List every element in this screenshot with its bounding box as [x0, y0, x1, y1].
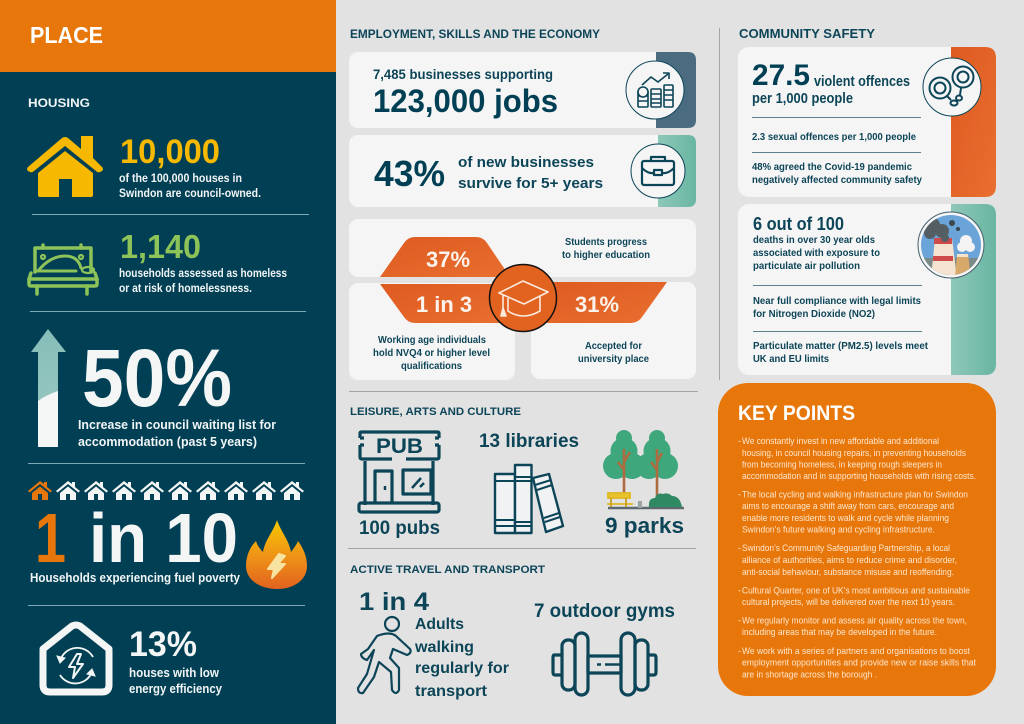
- education group: university place: [578, 354, 650, 365]
- card: air pollution: 6 out of 100: [753, 214, 844, 234]
- label: outdoor gyms: 7 outdoor gyms: [534, 601, 675, 622]
- card: violent offences: per 1,000 people: [752, 91, 853, 107]
- icon: handcuffs: [923, 58, 981, 116]
- education group: Students progress: [565, 237, 648, 248]
- title: PLACE: [30, 22, 103, 48]
- panel: employment, skills and the economy: [349, 29, 696, 380]
- heading: leisure: LEISURE, ARTS AND CULTURE: [350, 406, 521, 418]
- card: violent offences: 27.5: [752, 59, 810, 92]
- icon: flame: [246, 520, 307, 589]
- text: point 2: -: [738, 490, 741, 500]
- header band: [0, 0, 336, 72]
- text: point 1: accommodation and in supporting households with rising costs.: [742, 471, 976, 481]
- text: point 5: -: [738, 616, 741, 626]
- text: point 6: We work with a series of partners and organisations to boost: [742, 646, 970, 656]
- stat: 50%: Increase in council waiting list for: [78, 417, 276, 432]
- stat: 10,000: of the 100,000 houses in: [119, 171, 242, 185]
- text: adults walking: transport: [415, 683, 487, 700]
- ribbon: 37%: [380, 237, 510, 277]
- icon: walking person: [358, 617, 411, 693]
- heading: housing: HOUSING: [28, 96, 90, 110]
- label: pubs: 100 pubs: [359, 518, 440, 539]
- arrow: upward increase: [31, 329, 66, 447]
- text: point 4: Cultural Quarter, one of UK’s most ambitious and sustainable: [742, 586, 970, 596]
- icon: chimneys pollution: [918, 212, 984, 278]
- card: violent offences: 2.3 sexual offences per 1,000 people: [752, 132, 916, 143]
- text: point 4: -: [738, 586, 741, 596]
- card: violent offences: [738, 47, 996, 197]
- text: adults walking: regularly for: [415, 660, 509, 677]
- stat: 13%: 13%: [129, 625, 197, 664]
- ribbon: 1 in 3: [380, 284, 510, 323]
- card: air pollution: associated with exposure to: [753, 247, 880, 259]
- card: air pollution: [738, 204, 996, 375]
- text: adults walking: [414, 616, 509, 700]
- education group: 31%: [575, 292, 619, 317]
- education group: qualifications: [401, 361, 463, 372]
- icon: trees and bench: [603, 430, 684, 508]
- text: point 3: -: [738, 543, 741, 553]
- panel: community safety: [738, 27, 996, 375]
- text: adults walking: Adults: [415, 616, 464, 633]
- label: libraries: 13 libraries: [479, 431, 579, 452]
- stat: 1,140: or at risk of homelessness.: [119, 281, 252, 295]
- stat: 13%: houses with low: [129, 666, 219, 680]
- panel: place housing: [0, 0, 336, 724]
- text: point 2: [738, 490, 968, 534]
- heading: employment: EMPLOYMENT, SKILLS AND THE ECONOMY: [350, 29, 600, 41]
- text: point 1: [738, 436, 976, 481]
- text: point 2: Swindon’s future walking and cycling infrastructure.: [742, 524, 935, 534]
- icon: briefcase: [631, 144, 685, 198]
- icon: books: [495, 465, 563, 533]
- stat: 50%: 50%: [82, 333, 232, 424]
- text: point 1: from becoming homeless, in keeping rough sleepers in: [742, 460, 942, 470]
- education group: hold NVQ4 or higher level: [373, 348, 490, 359]
- stat: 1 in 10: in 10: [89, 499, 238, 577]
- heading: key points: KEY POINTS: [738, 402, 855, 425]
- icon: yellow house: [27, 136, 103, 197]
- text: point 5: including areas that may be developed in the future.: [742, 627, 937, 637]
- card: business survival: 43%: [374, 153, 445, 194]
- icon: green bed: [29, 245, 97, 294]
- panel: leisure, arts and culture: [350, 406, 684, 539]
- text: point 6: employment opportunities and provide new or raise skills that: [742, 658, 976, 668]
- icon: energy house: [43, 625, 109, 692]
- text: point 4: [738, 586, 970, 607]
- card: air pollution: Particulate matter (PM2.5) levels meet: [753, 341, 929, 352]
- stat: 1,140: 1,140: [120, 228, 201, 265]
- card: violent offences: negatively affected community safety: [752, 175, 922, 186]
- stat: 1,140: [119, 228, 287, 295]
- card: violent offences: 48% agreed the Covid-19 pandemic: [752, 162, 912, 173]
- text: point 1: We constantly invest in new affordable and additional: [742, 436, 939, 446]
- education group: Accepted for: [585, 341, 642, 352]
- text: point 3: alliance of authorities, aims to reduce crime and disorder,: [742, 555, 957, 565]
- stat: 1 in 10: Households experiencing fuel poverty: [30, 570, 241, 585]
- text: point 6: [738, 646, 976, 680]
- stat: 10,000: [119, 133, 261, 200]
- text: point 3: Swindon’s Community Safeguarding Partnership, a local: [742, 543, 950, 553]
- panel: active travel and transport: [350, 564, 675, 700]
- education group: 37%: [426, 247, 470, 272]
- heading: community safety: COMMUNITY SAFETY: [739, 27, 876, 41]
- card: air pollution: deaths in over 30 year olds: [753, 234, 875, 246]
- ribbon: 31%: [530, 282, 667, 323]
- text: point 1: -: [738, 436, 741, 446]
- text: point 2: The local cycling and walking infrastructure plan for Swindon: [742, 490, 968, 500]
- pub sign lettering: PUB: [376, 435, 423, 458]
- card: air pollution: for Nitrogen Dioxide (NO2): [753, 309, 875, 320]
- stat: 50%: accommodation (past 5 years): [78, 434, 257, 449]
- text: point 4: cultural projects, will be delivered over the next 10 years.: [742, 597, 955, 607]
- card: air pollution: UK and EU limits: [753, 354, 829, 365]
- icon: dumbbell: [553, 633, 656, 695]
- stat: 1,140: households assessed as homeless: [119, 266, 287, 280]
- education group: 1 in 3: [416, 292, 472, 317]
- education group: [349, 219, 696, 380]
- card: air pollution: Near full compliance with legal limits: [753, 296, 921, 307]
- text: point 5: We regularly monitor and assess air quality across the town,: [742, 616, 967, 626]
- text: point 3: [738, 543, 957, 577]
- stat: 1 in 10: 1: [35, 499, 66, 577]
- text: point 2: enable more residents to walk and cycle while planning: [742, 513, 949, 523]
- stat: 50%: [78, 333, 276, 449]
- stat: 1 in 4: 1 in 4: [359, 588, 429, 616]
- text: point 6: -: [738, 646, 741, 656]
- stat: 1 in 10: [30, 499, 241, 585]
- card: jobs: 7,485 businesses supporting: [373, 67, 553, 82]
- icon row: ten houses: [28, 481, 304, 500]
- stat: 10,000: 10,000: [120, 133, 220, 171]
- card: air pollution: particulate air pollution: [753, 260, 860, 272]
- card: business survival: [349, 135, 696, 207]
- education group: to higher education: [562, 250, 650, 261]
- panel: key points: [718, 383, 996, 696]
- text: point 3: anti-social behaviour, substance misuse and reoffending.: [742, 567, 954, 577]
- text: adults walking: walking: [414, 639, 474, 656]
- icon: graduation cap: [490, 264, 556, 332]
- card: business survival: survive for 5+ years: [458, 175, 603, 192]
- heading: active travel: ACTIVE TRAVEL AND TRANSPORT: [350, 564, 545, 576]
- stat: 10,000: Swindon are council-owned.: [119, 186, 261, 200]
- stat: 13%: energy efficiency: [129, 682, 222, 696]
- label: parks: 9 parks: [605, 513, 684, 538]
- text: point 1: housing, in council housing repairs, in preventing households: [742, 448, 966, 458]
- icon: growth chart coins: [626, 61, 684, 119]
- education group: Working age individuals: [378, 335, 487, 346]
- card: business survival: of new businesses: [458, 154, 594, 171]
- icon: pub: [359, 432, 439, 512]
- text: point 2: aims to encourage a shift away from cars, encourage and: [742, 501, 954, 511]
- cards: [349, 219, 696, 277]
- card: jobs: [349, 52, 696, 128]
- card: violent offences: violent offences: [814, 74, 910, 90]
- text: point 5: [738, 616, 967, 637]
- card: jobs: 123,000 jobs: [373, 83, 558, 119]
- stat: 13%: [129, 625, 222, 696]
- text: point 6: are in shortage across the borough .: [742, 670, 877, 680]
